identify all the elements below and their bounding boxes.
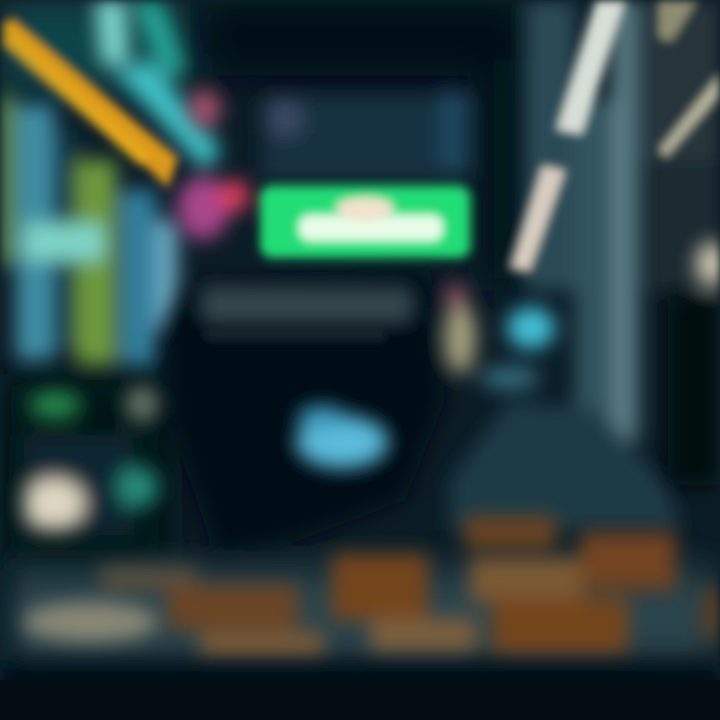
dark bottom band — [0, 560, 720, 720]
top left signage backdrop — [0, 0, 190, 565]
slate panel above sign — [262, 92, 470, 180]
right side metallic columns — [450, 0, 720, 530]
pink neon glow — [177, 88, 250, 240]
brown food blocks — [100, 516, 720, 656]
orange diagonal neon bar — [0, 18, 178, 188]
far right dark wall — [668, 242, 720, 485]
black central panel — [165, 270, 445, 555]
blue glowing blob — [296, 406, 388, 468]
dark central top area — [205, 0, 525, 290]
green glowing sign — [260, 186, 470, 258]
small reflections — [444, 284, 555, 390]
grey bowl — [22, 602, 158, 642]
bottom edge shadow — [0, 680, 720, 720]
cyan neon stripes — [95, 0, 222, 172]
left vertical stripes — [0, 95, 178, 365]
white light streaks — [510, 0, 720, 272]
lower left lights — [24, 386, 158, 535]
table surface — [0, 570, 720, 660]
